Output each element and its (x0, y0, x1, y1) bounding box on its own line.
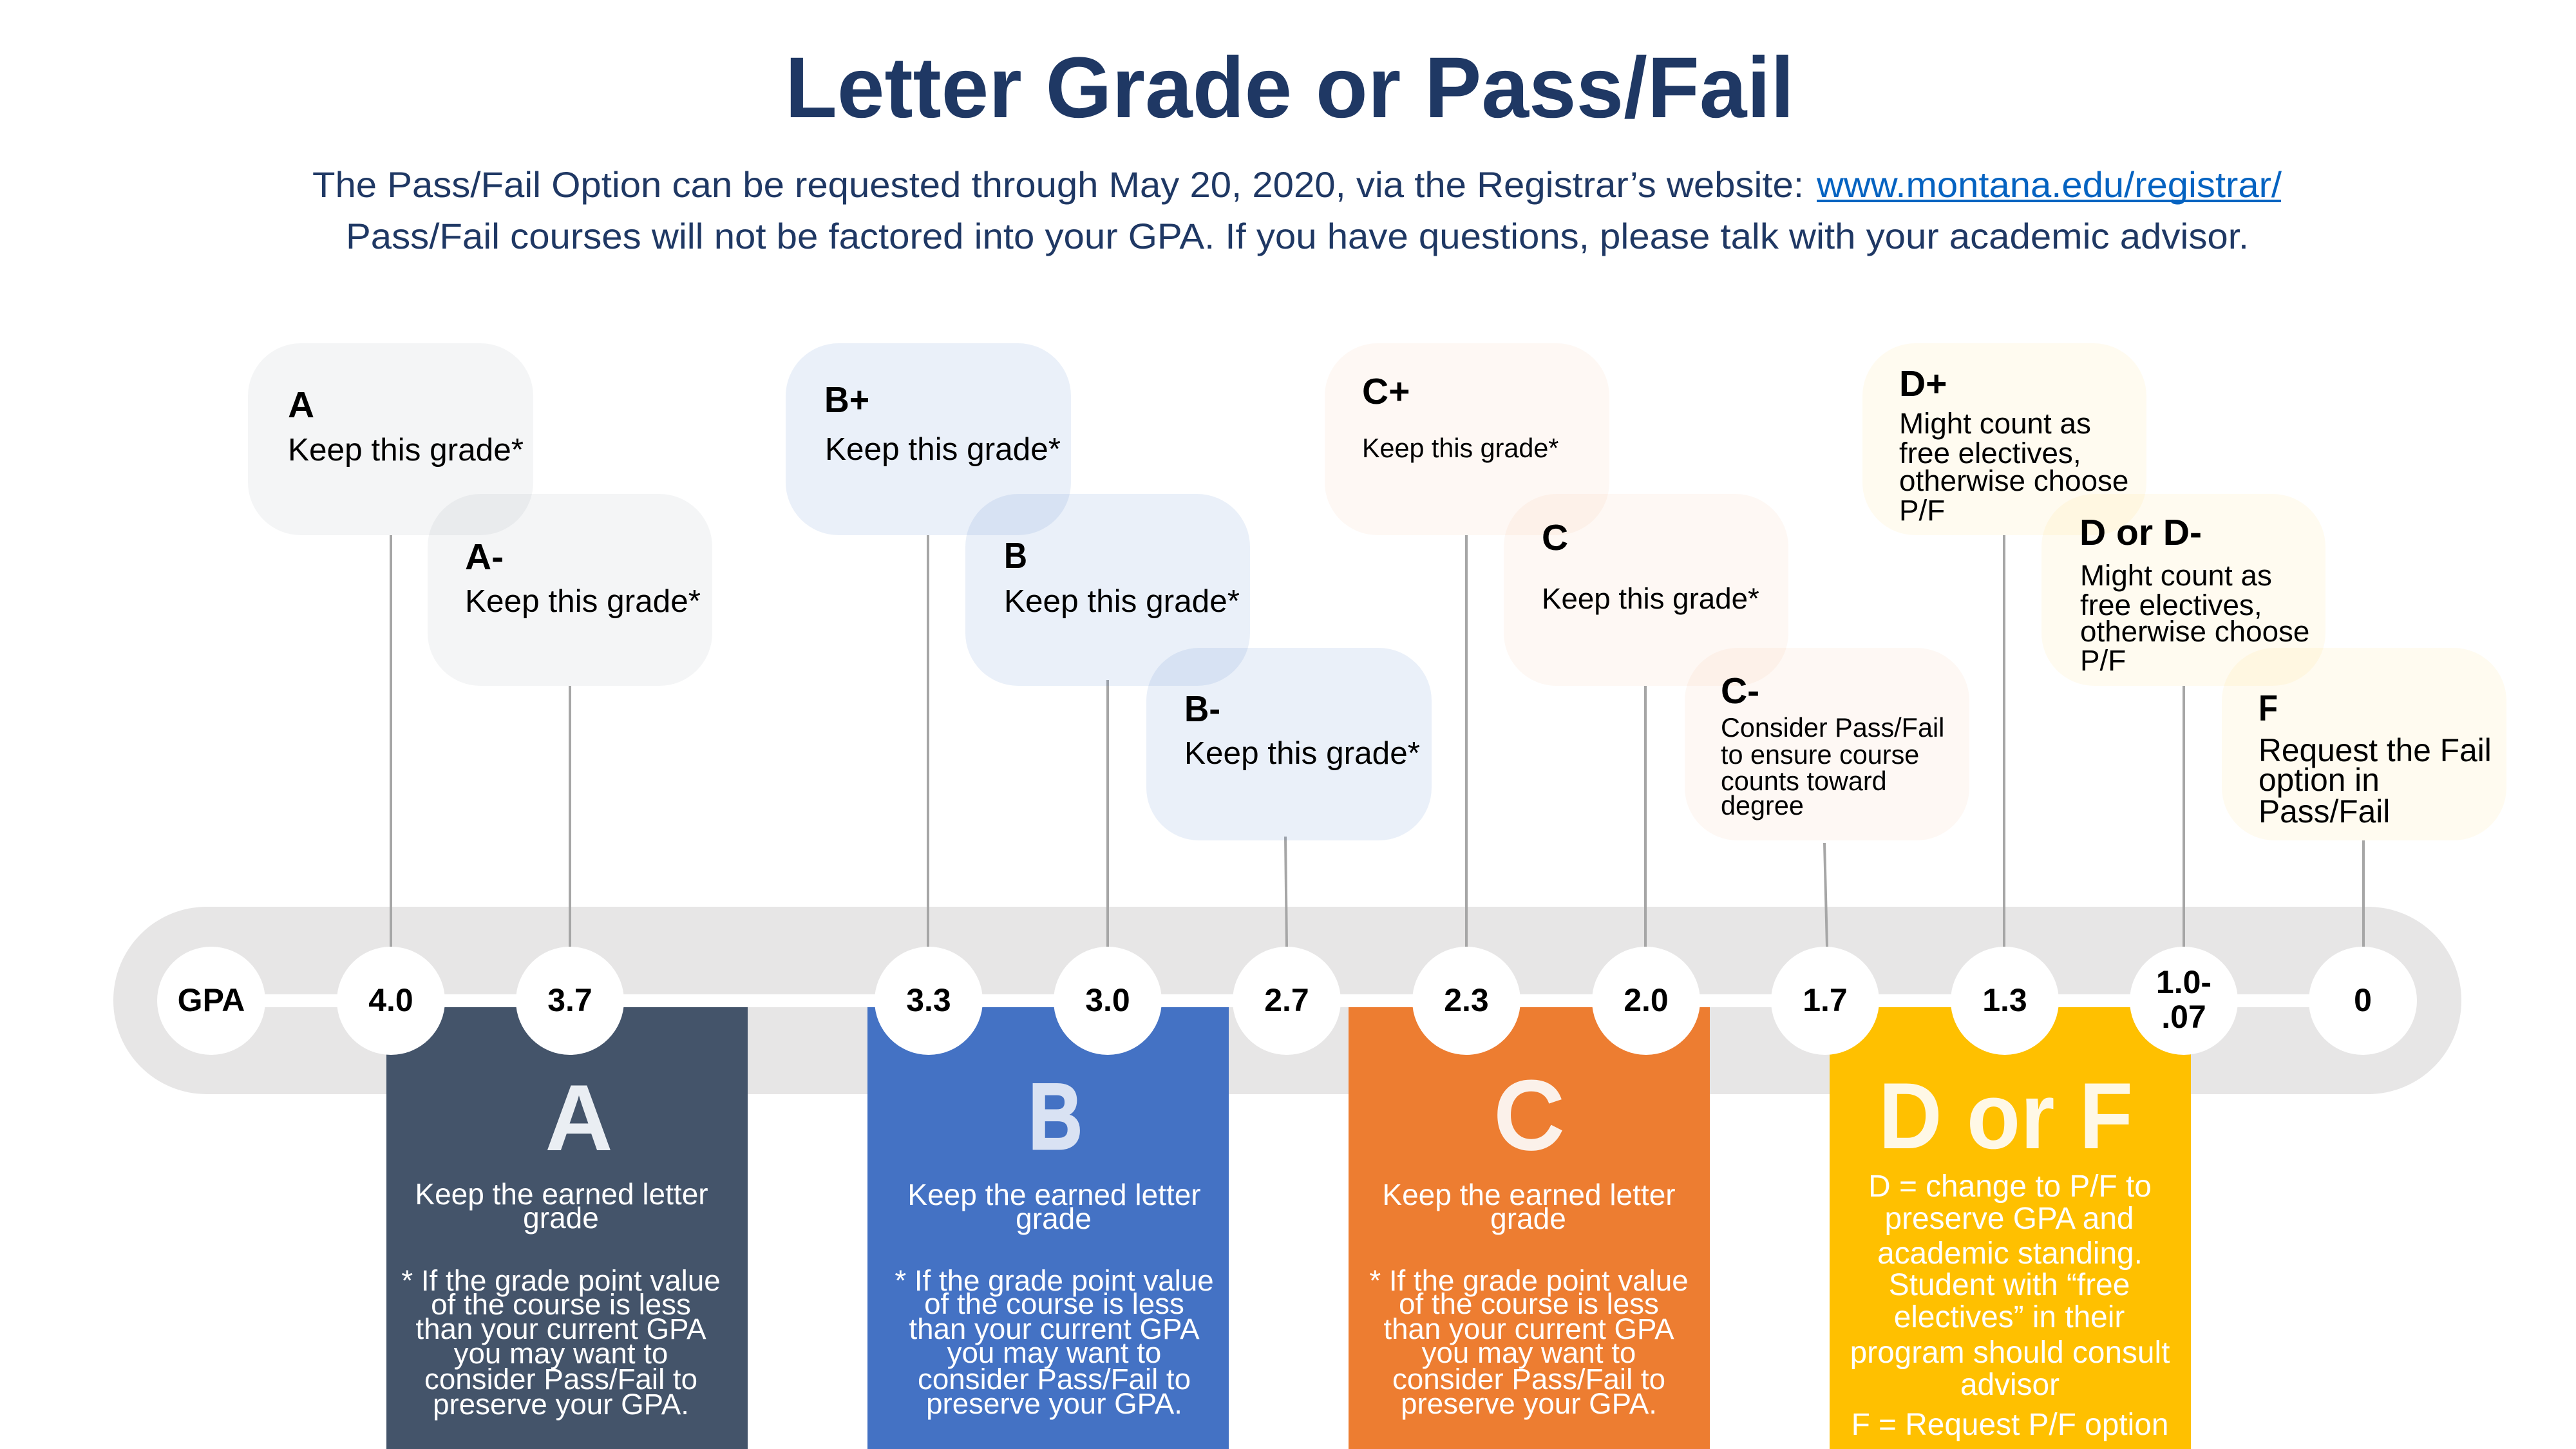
node: 3.0: 3.0 (1085, 982, 1130, 1018)
panel B text (895, 1178, 1214, 1420)
callout: C+: Keep this grade* (1362, 433, 1558, 463)
callout: D or D- (2041, 494, 2325, 686)
panel B text: consider Pass/Fail to (918, 1363, 1191, 1396)
callout: B (965, 494, 1250, 686)
panel C text (1369, 1178, 1689, 1420)
panel letter C: C (1495, 1063, 1563, 1168)
callout: A-: Keep this grade* (465, 583, 701, 619)
panel B text: preserve your GPA. (926, 1387, 1182, 1420)
panel D or F text (1850, 1170, 2170, 1442)
panel A text: consider Pass/Fail to (424, 1363, 697, 1396)
callout: A- (428, 494, 712, 686)
node: 3.0 (1054, 947, 1162, 1055)
connector: B (1106, 680, 1109, 947)
panel D or F text: advisor (1960, 1368, 2060, 1402)
callout: C-: Consider Pass/Fail (1721, 713, 1944, 743)
node: 2.0: 2.0 (1624, 982, 1669, 1018)
callout: F: option in (2259, 762, 2380, 798)
node: 2.7 (1233, 947, 1341, 1055)
node: 4.0 (337, 947, 445, 1055)
node: 3.3 (875, 947, 983, 1055)
callout: C-: C- (1721, 670, 1759, 712)
panel D or F text: academic standing. (1877, 1236, 2143, 1271)
connector: D+ (2003, 535, 2005, 947)
panel A text: grade (523, 1201, 599, 1235)
node: 3.7: 3.7 (547, 982, 592, 1018)
panel: A (386, 1007, 748, 1449)
callout: B: Keep this grade* (1004, 583, 1240, 619)
panel: B (867, 1007, 1229, 1449)
callout: B-: B- (1184, 688, 1220, 730)
GPA timeline bar (113, 907, 2461, 1094)
panel C text: grade (1490, 1202, 1566, 1235)
callout: D+: otherwise choose (1899, 464, 2128, 497)
callout: D+ (1862, 343, 2146, 535)
panel C text: preserve your GPA. (1401, 1387, 1657, 1420)
subtitle line 2: Pass/Fail courses will not be factored into your GPA. If you have questions, please talk with your academic advisor. (346, 216, 2249, 256)
panel B text: Keep the earned letter (907, 1178, 1201, 1211)
callout: D+: free electives, (1899, 437, 2081, 469)
callout: D or D-: free electives, (2080, 589, 2262, 621)
callout: D or D-: D or D- (2079, 512, 2202, 553)
panel B text: of the course is less (924, 1287, 1184, 1320)
callout: C (1504, 494, 1788, 686)
callout: A (248, 343, 533, 535)
panel letters D or F: D or F (1879, 1063, 2133, 1168)
callout: C+: C+ (1362, 371, 1410, 412)
panel B text: than your current GPA (909, 1312, 1200, 1345)
callout: F (2222, 648, 2506, 840)
node: 1.0-.07: .07 (2161, 999, 2206, 1035)
panel: C (1349, 1007, 1710, 1449)
panel A text: * If the grade point value (401, 1264, 721, 1297)
panel C text: consider Pass/Fail to (1392, 1363, 1665, 1396)
panel A text: of the course is less (431, 1288, 691, 1321)
callout: C-: counts toward (1721, 766, 1887, 796)
panel C text: of the course is less (1399, 1287, 1659, 1320)
node: 1.7: 1.7 (1803, 982, 1848, 1018)
callout: A-: A- (465, 536, 504, 578)
callout: B+: Keep this grade* (825, 431, 1061, 467)
callout: D or D-: otherwise choose (2080, 615, 2309, 648)
panel D or F text: electives” in their (1894, 1300, 2125, 1334)
panel D or F text: program should consult (1850, 1336, 2170, 1370)
callout: B: B (1004, 535, 1027, 576)
node: 1.7 (1771, 947, 1879, 1055)
callout: D or D-: P/F (2080, 644, 2126, 677)
panel B text: you may want to (947, 1336, 1161, 1369)
callout: A: A (288, 384, 314, 426)
panel B text: * If the grade point value (895, 1264, 1214, 1297)
panel D or F text: D = change to P/F to (1868, 1170, 2152, 1204)
callout: B-: Keep this grade* (1184, 735, 1420, 771)
connector: F (2362, 840, 2365, 947)
panel letter A: A (545, 1065, 613, 1170)
callout: D or D-: Might count as (2080, 559, 2272, 592)
connector: A (390, 535, 392, 947)
panel A text: preserve your GPA. (433, 1388, 689, 1421)
node: 2.3: 2.3 (1444, 982, 1489, 1018)
connector: A- (569, 686, 571, 947)
panel B text: grade (1016, 1202, 1092, 1235)
connector: C+ (1465, 535, 1468, 947)
connector: C (1644, 686, 1647, 947)
node: 2.0 (1592, 947, 1700, 1055)
callout: F: F (2259, 688, 2278, 729)
callout: C+ (1325, 343, 1609, 535)
panel A text (401, 1177, 721, 1421)
callout: B+: B+ (824, 379, 869, 421)
timeline white track (211, 994, 2362, 1007)
node: 0: 0 (2354, 982, 2372, 1018)
callout: D+: P/F (1899, 494, 1945, 527)
node: 2.3 (1412, 947, 1520, 1055)
node: 1.3 (1951, 947, 2059, 1055)
callout: B+ (786, 343, 1071, 535)
registrar link: www.montana.edu/registrar/ (1816, 164, 2282, 205)
callout: D+: D+ (1899, 363, 1947, 404)
panel A text: than your current GPA (415, 1312, 706, 1345)
panel D or F text: F = Request P/F option (1852, 1408, 2168, 1442)
node: 4.0: 4.0 (368, 982, 413, 1018)
panel C text: * If the grade point value (1369, 1264, 1689, 1297)
panel A text: Keep the earned letter (415, 1177, 708, 1211)
panel D or F text: preserve GPA and (1884, 1202, 2134, 1236)
panel D or F text: Student with “free (1889, 1268, 2130, 1302)
panel C text: than your current GPA (1383, 1312, 1674, 1345)
connector: C- (1824, 843, 1827, 947)
connector: B- (1285, 837, 1287, 947)
callout: C: Keep this grade* (1542, 582, 1759, 615)
callout: C: C (1542, 517, 1568, 558)
callout: A: Keep this grade* (288, 432, 524, 468)
connector lines (391, 535, 2363, 947)
panel: D or F (1830, 1007, 2191, 1449)
node: 2.7: 2.7 (1264, 982, 1309, 1018)
callout: F: Pass/Fail (2259, 793, 2390, 829)
node: 3.3: 3.3 (906, 982, 951, 1018)
callout: C- (1685, 648, 1969, 840)
callout: C-: degree (1721, 791, 1804, 820)
callout: D+: Might count as (1899, 407, 2091, 440)
callout: B- (1146, 648, 1432, 840)
node: 1.0-.07 (2130, 947, 2238, 1055)
panel C text: you may want to (1422, 1336, 1636, 1369)
callout: C-: to ensure course (1721, 740, 1919, 770)
node: GPA label: GPA (178, 982, 245, 1018)
node: 3.7 (516, 947, 624, 1055)
node: 0 (2309, 947, 2417, 1055)
node: 1.0-.07: 1.0- (2156, 964, 2211, 1000)
panel A text: you may want to (454, 1337, 668, 1370)
node: GPA label (157, 947, 265, 1055)
panel letter B: B (1028, 1064, 1083, 1169)
node: 1.3: 1.3 (1982, 982, 2027, 1018)
panel C text: Keep the earned letter (1382, 1178, 1676, 1211)
subtitle text block (312, 164, 2282, 256)
callout: F: Request the Fail (2259, 732, 2492, 768)
GPA scale nodes (157, 947, 2417, 1055)
title: Letter Grade or Pass/Fail (785, 40, 1794, 136)
connector: B+ (927, 535, 929, 947)
subtitle line 1: The Pass/Fail Option can be requested through May 20, 2020, via the Registrar’s website: (312, 164, 1804, 205)
connector: D or D- (2183, 686, 2185, 947)
